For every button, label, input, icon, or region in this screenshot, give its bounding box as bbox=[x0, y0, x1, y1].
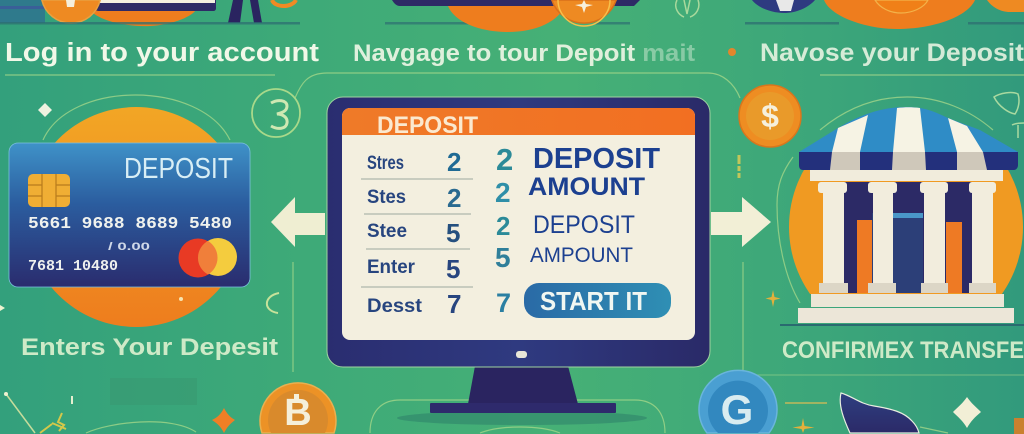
icon: orange diamond bbox=[212, 408, 235, 433]
orange circle behind bank bbox=[789, 170, 1023, 294]
card holder text: 7681 10480 bbox=[28, 258, 118, 275]
caption: choose: Navose your Deposit bbox=[760, 39, 1024, 67]
right column numbers: 2 bbox=[496, 211, 510, 241]
right column labels: DEPOSIT bbox=[533, 143, 660, 175]
right column numbers bbox=[495, 142, 513, 318]
panel: credit card bbox=[9, 107, 250, 327]
card small text: / 0.00 bbox=[108, 241, 150, 253]
card body bbox=[9, 143, 250, 287]
icon: white tick bbox=[71, 396, 73, 404]
left column rows: Stes bbox=[367, 187, 406, 208]
roof bbox=[799, 107, 1018, 170]
icon: wand star bbox=[40, 413, 66, 433]
icon: bitcoin coin bbox=[260, 383, 336, 434]
card number: 5661 9688 8689 5480 bbox=[28, 215, 232, 234]
icon: dollar coin: $ bbox=[761, 98, 779, 134]
right column labels: AMPOUNT bbox=[530, 244, 633, 267]
caption: log in: Log in to your account bbox=[5, 39, 320, 67]
left column rows: Stres bbox=[367, 153, 404, 174]
monitor shadow bbox=[397, 411, 647, 425]
power light bbox=[516, 351, 527, 358]
right column numbers: 2 bbox=[496, 142, 513, 177]
right column labels: AMOUNT bbox=[528, 173, 645, 201]
icon: blue currency coin bbox=[699, 370, 777, 433]
orange dot bbox=[728, 48, 736, 56]
left column numbers bbox=[446, 147, 461, 319]
left column rows: Stee bbox=[367, 221, 407, 242]
decorative sparkles bbox=[0, 93, 1024, 433]
interior bbox=[844, 182, 973, 293]
left column rows: Desst bbox=[367, 296, 423, 317]
top strip illustrations bbox=[0, 0, 1024, 32]
right scene remnant bbox=[745, 0, 1024, 29]
caption: enters deposit: Enters Your Depesit bbox=[21, 334, 278, 361]
monitor stand bbox=[468, 366, 578, 404]
icon: cream diamond bbox=[953, 397, 981, 428]
icon: orange corner bottom right bbox=[1014, 418, 1024, 434]
start button bbox=[524, 283, 671, 318]
icon: number three bbox=[252, 89, 300, 137]
arrow: right bbox=[711, 197, 771, 247]
left column rows bbox=[367, 153, 423, 317]
monitor bezel bbox=[327, 97, 710, 367]
icon: gold sparkle bottom bbox=[792, 418, 814, 433]
icon: wand tip bbox=[4, 392, 8, 396]
right column numbers: 7 bbox=[496, 288, 511, 318]
screen header bbox=[342, 108, 695, 139]
orange circle behind card bbox=[26, 107, 246, 327]
screen header: DEPOSIT bbox=[377, 112, 478, 139]
right column numbers: 2 bbox=[495, 177, 511, 208]
panel: bank bbox=[780, 107, 1024, 344]
left column numbers: 5 bbox=[446, 218, 460, 248]
icon: card logo bbox=[178, 238, 237, 278]
icon: sparkle left edge bbox=[0, 305, 5, 311]
columns bbox=[818, 182, 996, 293]
entablature bbox=[810, 170, 1003, 181]
icon: chip bbox=[28, 174, 70, 207]
right column labels: DEPOSIT bbox=[533, 211, 635, 239]
icon: dot on orange bbox=[179, 297, 183, 301]
left column numbers: 2 bbox=[447, 183, 461, 213]
icon: navy shape bottom bbox=[840, 393, 919, 433]
left scene remnant bbox=[0, 0, 300, 26]
icon: top right doodle bbox=[994, 93, 1024, 138]
icon: wand bbox=[6, 394, 35, 433]
steps bbox=[811, 294, 1004, 307]
screen bbox=[342, 108, 695, 340]
icon: tick marks bbox=[738, 155, 740, 178]
step captions top row bbox=[5, 39, 1024, 67]
panel: monitor bbox=[327, 97, 710, 425]
icon: bitcoin coin: B bbox=[284, 392, 312, 434]
icon: gold sparkle bbox=[766, 290, 780, 307]
middle scene remnant bbox=[385, 0, 699, 32]
icon: line ornament bbox=[785, 402, 827, 404]
right column labels bbox=[528, 143, 660, 267]
left column rows: Enter bbox=[367, 257, 416, 278]
caption: navigate: Navgage to tour Depoit mait bbox=[353, 40, 695, 67]
row dividers bbox=[361, 179, 473, 287]
icon: sparkle top left bbox=[38, 103, 52, 117]
left column numbers: 7 bbox=[447, 289, 461, 319]
arrow: left bbox=[271, 197, 325, 247]
card label: DEPOSIT bbox=[124, 153, 233, 185]
icon: blue currency coin: G bbox=[721, 386, 753, 433]
icon: dollar coin bbox=[739, 85, 801, 147]
start button: START IT bbox=[540, 286, 647, 316]
icon: small crescent bbox=[267, 293, 279, 313]
right column numbers: 5 bbox=[495, 242, 511, 273]
left column numbers: 5 bbox=[446, 254, 460, 284]
left column numbers: 2 bbox=[447, 147, 461, 177]
